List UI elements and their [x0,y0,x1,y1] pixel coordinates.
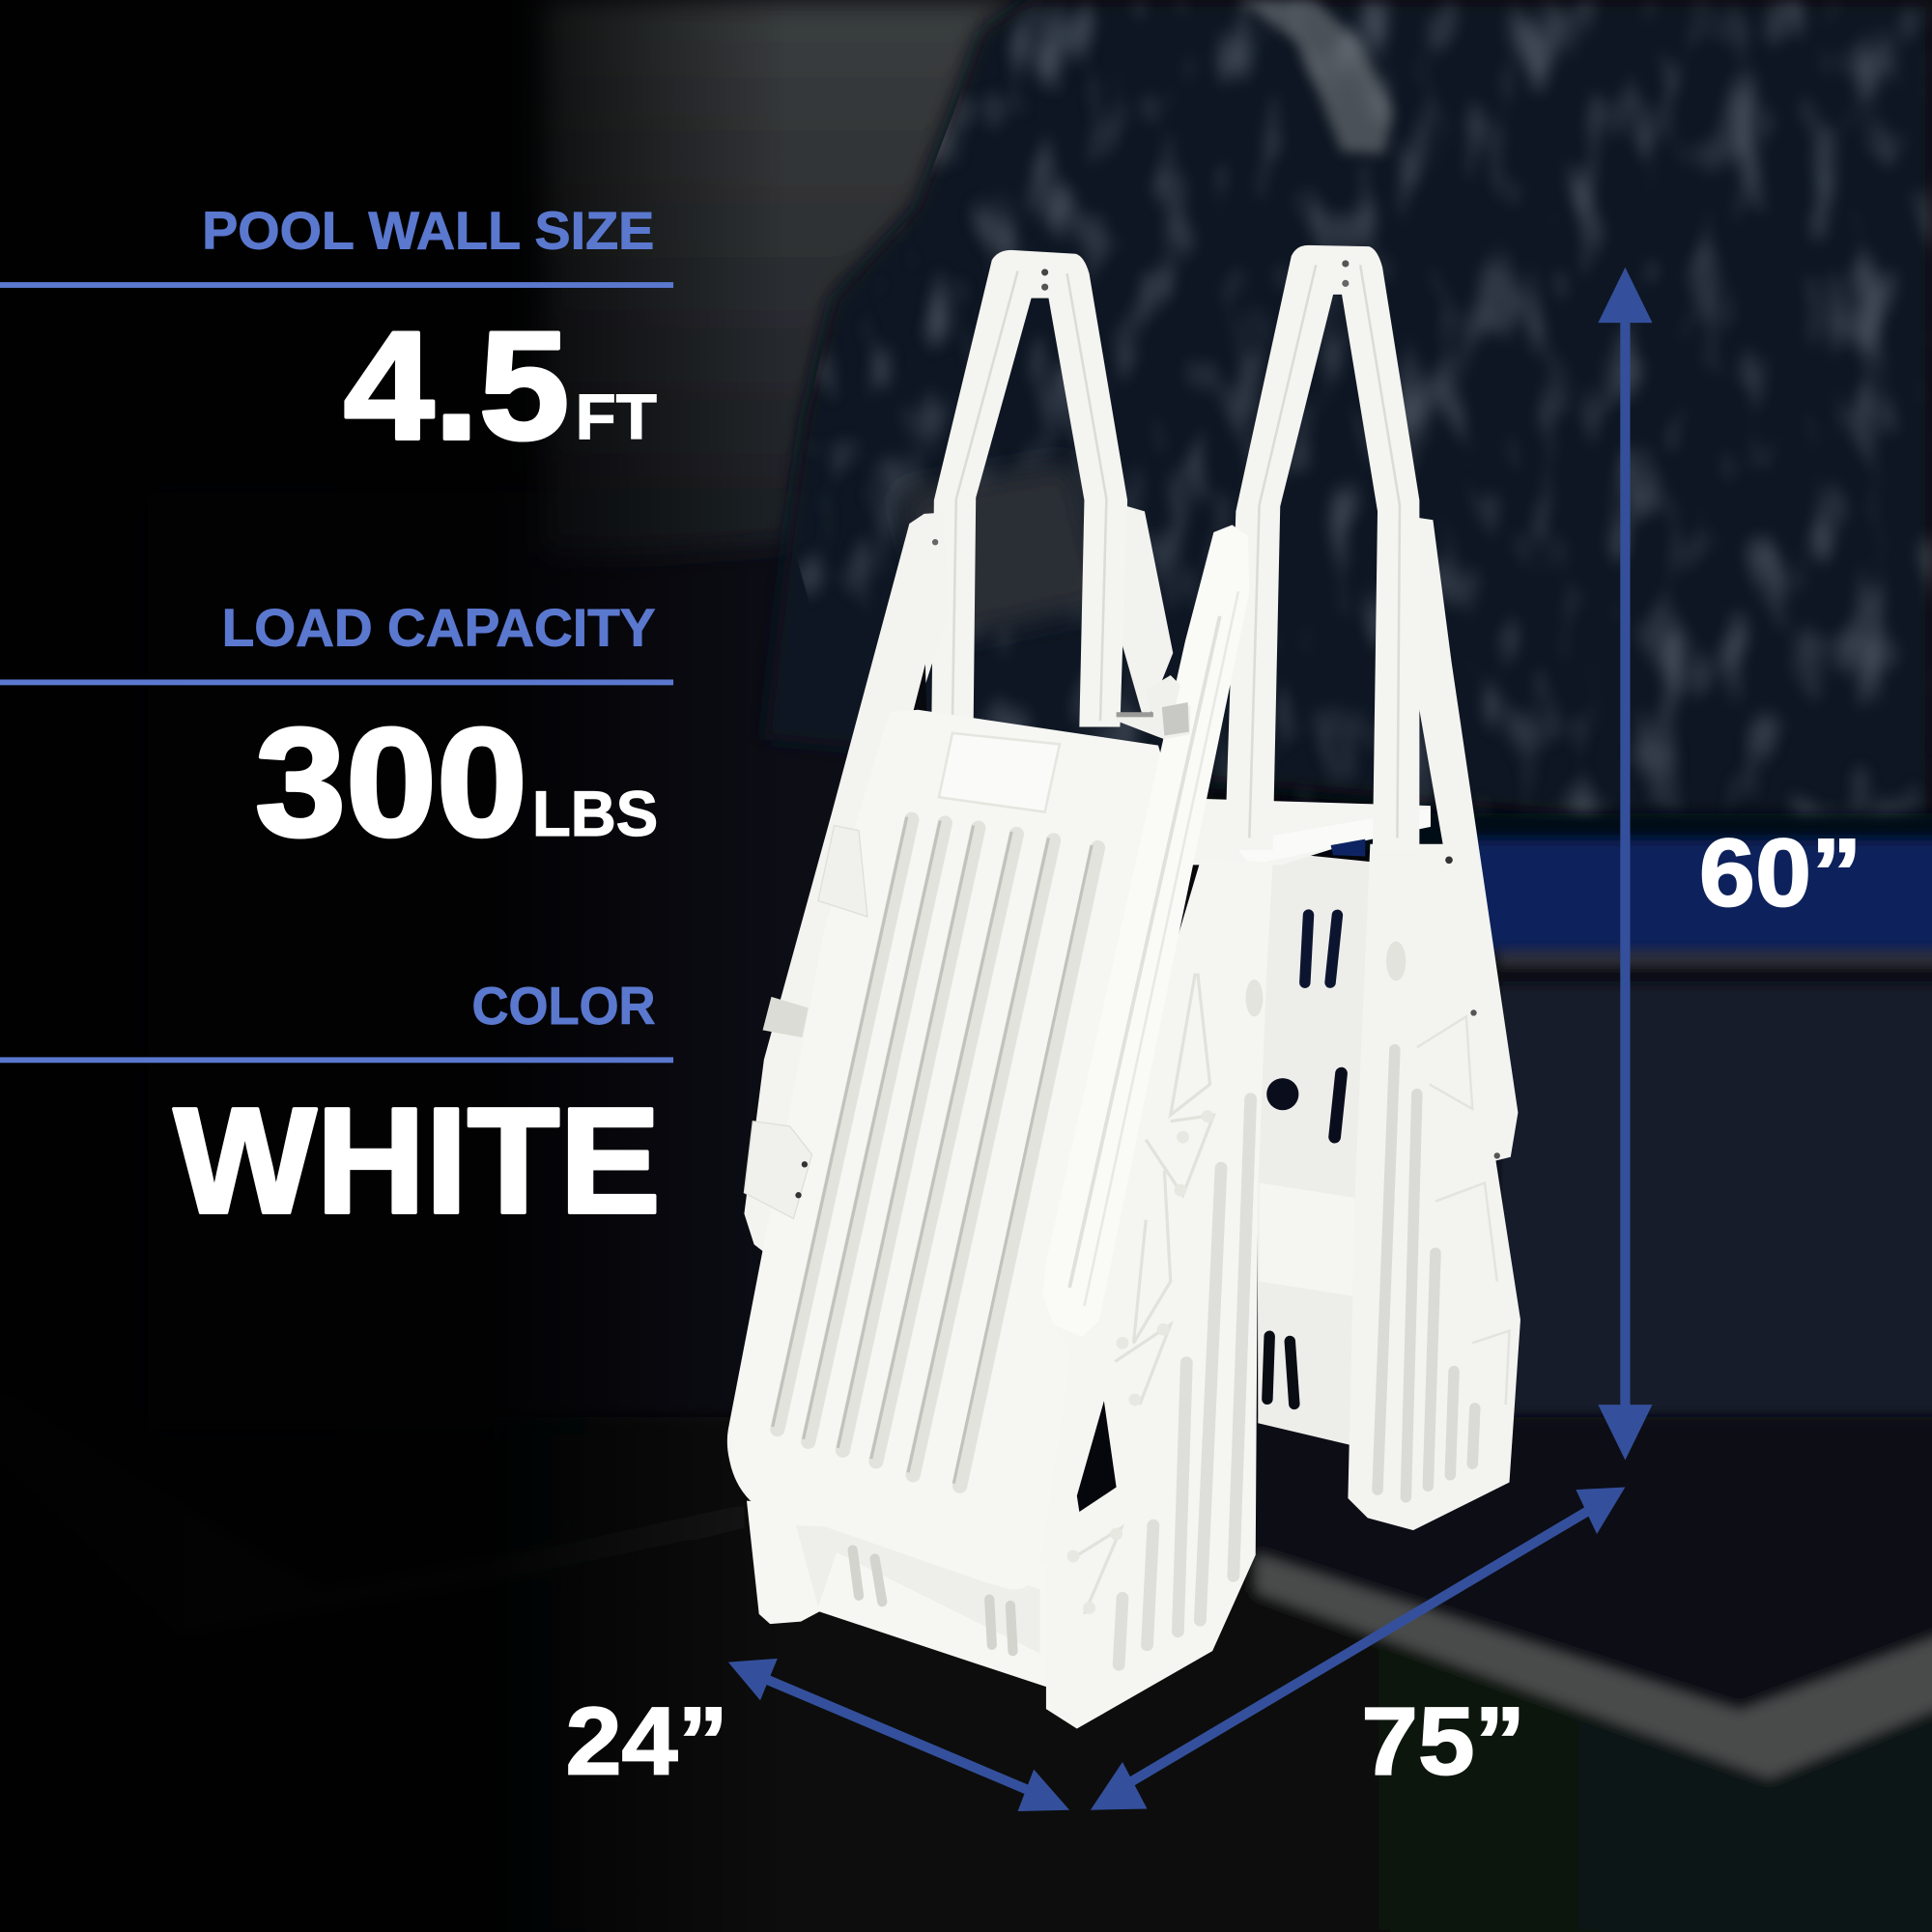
dimension label: length: 75” [1361,1689,1525,1796]
back left brace [1120,505,1173,727]
front side plate [1033,858,1273,1729]
rule [0,679,673,685]
arrow: length 75 in [1091,1488,1625,1810]
spec: pool wall size [0,201,673,471]
tree line [764,0,1932,850]
value: 300 [255,696,527,868]
triangular cut-out [1077,1401,1117,1512]
lower frame under door [747,1501,1046,1687]
door latch [1117,675,1190,739]
spec: load capacity [0,597,673,868]
door ribs [778,819,1097,1486]
label: LOAD CAPACITY [222,597,656,657]
value: WHITE [174,1076,661,1244]
left arch handrail [931,250,1127,727]
unit: LBS [532,779,658,850]
platform [1189,799,1431,865]
dimension label: height: 60” [1699,819,1861,926]
rule [0,1057,673,1063]
front door panel [727,710,1164,1590]
background: blurred dark backyard photo [547,0,1932,1932]
ground [0,1392,1932,1932]
rear step panel [1257,850,1378,1452]
rule [0,282,673,288]
arrow: height 60 in [1598,268,1652,1460]
far side of pool [1233,813,1932,1419]
sky [542,0,1035,554]
hinge: lower [744,1122,812,1218]
bright sky gap between trees [1240,0,1394,154]
hinge: upper [818,826,867,917]
door handle tab [763,997,809,1037]
handrail side strip [1042,525,1249,1337]
rear right side plate [1348,518,1520,1530]
pale sky behind lower branches [899,462,1109,640]
label: POOL WALL SIZE [202,201,654,261]
front left brace [744,513,949,1257]
leaf texture [788,0,1932,850]
unit: FT [576,382,657,453]
label: COLOR [472,976,656,1036]
value: 4.5 [344,299,569,471]
right arch handrail [1225,245,1419,850]
arrow: width 24 in [728,1659,1069,1811]
dimension label: width: 24” [565,1689,728,1796]
spec: color [0,976,673,1244]
door label plate [939,733,1060,812]
hedge and faint structure below the sky [148,493,961,1430]
ladder product [727,245,1520,1729]
